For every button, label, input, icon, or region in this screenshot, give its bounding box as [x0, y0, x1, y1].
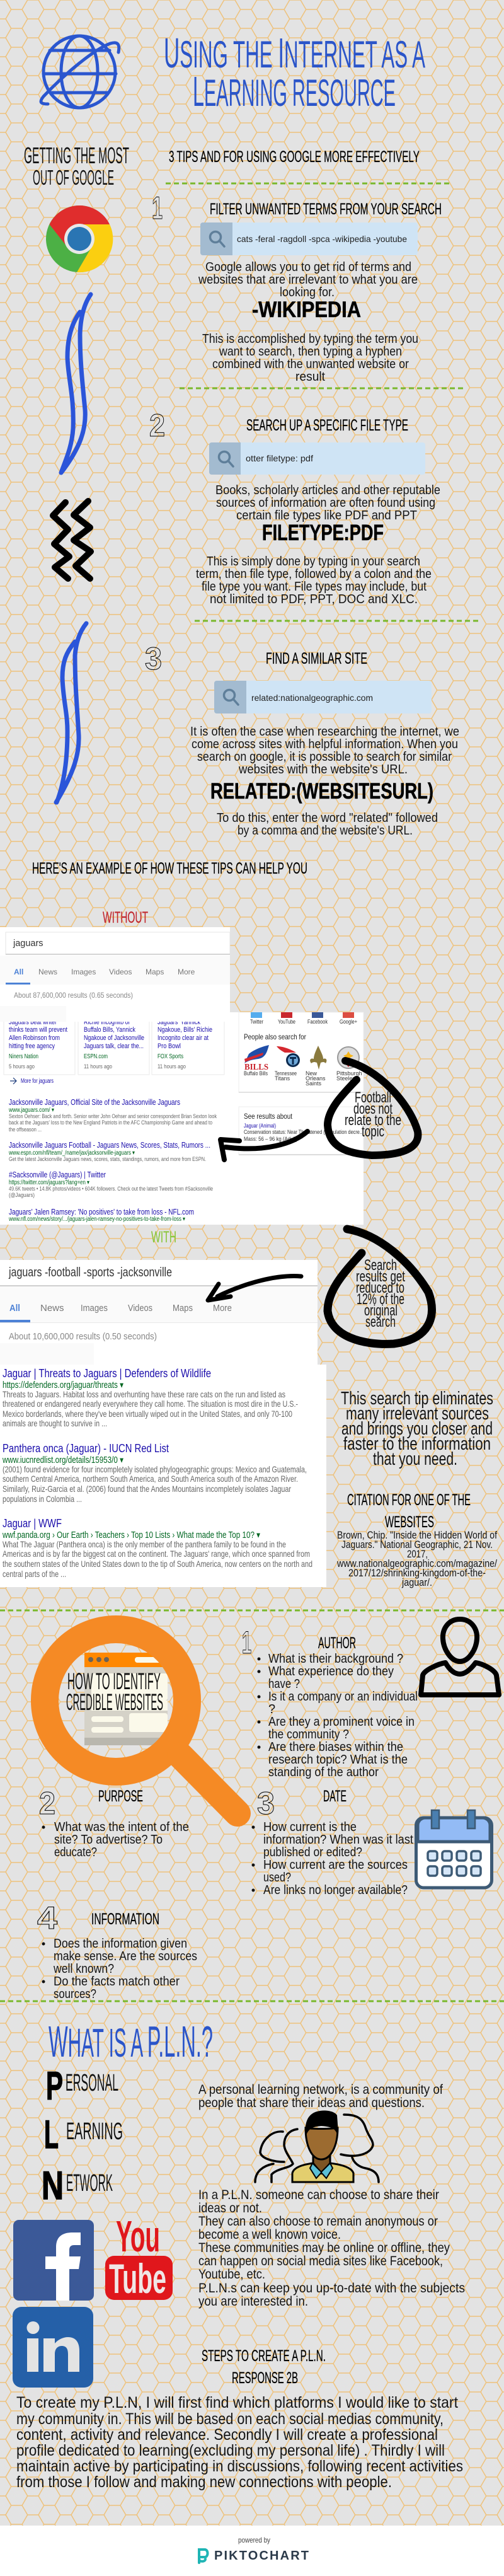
- title: [164, 30, 425, 115]
- search results list: Jacksonville Jaguars, Official Site of the Jacksonville Jaguars: [9, 1097, 180, 1107]
- news cards: Jaguars talk, clear the...: [84, 1043, 144, 1050]
- result: defenders of wildlife: Mexico borderlands, where they've been virtually wiped out in the United States, and only 70-100: [3, 1409, 292, 1419]
- text: steps paragraph: profile dedicated to learning(excluding my personal life) . Thirdly I will: [16, 2442, 445, 2459]
- callout: search results reduced: reduced to: [356, 1279, 404, 1297]
- icon: blue scribble 2: [56, 623, 86, 802]
- search box 3: related:nationalgeographic.com: [251, 693, 373, 703]
- tip 3 explanation: To do this, enter the word "related" followed: [217, 811, 438, 825]
- tip 3 heading: FIND A SIMILAR SITE: [266, 650, 367, 667]
- acronym: network: [42, 2164, 113, 2208]
- result: iucn red list: populations in Colombia ...: [3, 1494, 82, 1504]
- result: iucn red list: Panthera onca (Jaguar) - IUCN Red List: [3, 1442, 169, 1455]
- text: steps paragraph: content, activity and relevance. Secondly I will create a professional: [16, 2426, 438, 2444]
- screenshot: search without tip: More: [178, 967, 195, 976]
- tip 2 explanation: file type you want. File types may include, but: [202, 580, 427, 594]
- callout: football does not relate: does not: [353, 1100, 392, 1118]
- text: steps paragraph: my community in. This will be based on each social medias community,: [16, 2410, 444, 2428]
- icon: youtube: Tube: [109, 2255, 166, 2302]
- result: wwf: the southern states of the United States down to the tip of South America, now centers on the north and: [3, 1559, 312, 1569]
- acronym: learning: EARNING: [66, 2118, 123, 2145]
- criteria: date bullets: used?: [263, 1871, 291, 1885]
- result: iucn red list: www.iucnredlist.org/details/15953/0 ▾: [2, 1455, 124, 1465]
- icon: youtube: [105, 2212, 173, 2302]
- hand-drawn circle: reduced results callout: [328, 1229, 432, 1344]
- icon: globe: [41, 36, 119, 108]
- criteria: author bullets: Are they a prominent voice in: [268, 1715, 415, 1729]
- tip 2 heading: SEARCH UP A SPECIFIC FILE TYPE: [246, 417, 408, 434]
- criteria: author bullets: the community ?: [268, 1728, 349, 1741]
- search results list: Jaguars' Jalen Ramsey: 'No positives' to take from loss - NFL.com: [9, 1207, 194, 1216]
- tip 2 explanation: not limited to PDF, PPT, DOC and XLC.: [210, 592, 418, 606]
- icon: chrome logo: [46, 205, 113, 272]
- news cards: Allen Robinson from: [9, 1034, 60, 1042]
- text: PLN definition: people that share their ideas and questions.: [198, 2096, 425, 2110]
- news cards: Jaguars beat writer: [9, 1019, 57, 1026]
- screenshot: search without tip: About 87,600,000 results (0.65 seconds): [14, 991, 133, 1000]
- team logo: bills: [244, 1045, 269, 1072]
- infographic canvas: GETTING THE MOST: [24, 142, 129, 168]
- criteria: date bullets: How current are the sources: [263, 1858, 408, 1872]
- knowledge panel: [239, 1012, 364, 1155]
- citation heading: [347, 1491, 471, 1531]
- tip 1 explanation: [202, 332, 418, 384]
- screenshot: search with tip: News: [40, 1303, 64, 1314]
- icon: youtube: You: [116, 2212, 160, 2261]
- tip 2 number: 2: [149, 408, 165, 443]
- result: wwf: What The Jaguar (Panthera onca) is the only member of the panthera family to be found in the: [3, 1539, 286, 1549]
- result: defenders of wildlife: [3, 1367, 298, 1428]
- screenshot: search with tip: Maps: [173, 1303, 193, 1314]
- icon: person: [421, 1619, 499, 1695]
- result: wwf: [2, 1517, 312, 1579]
- infographic canvas: CREDIBLE WEBSITES: [66, 1689, 163, 1715]
- heading: getting the most out of google: [24, 142, 129, 189]
- tip 2 text: Books, scholarly articles and other reputable: [215, 483, 440, 497]
- criteria 3 number: 3: [257, 1786, 275, 1821]
- criteria: author bullets: research topic? What is the: [268, 1753, 408, 1767]
- heading: steps to create a PLN: STEPS TO CREATE A P.L.N.: [202, 2347, 326, 2365]
- text: PLN definition: A personal learning network, is a community of: [198, 2082, 443, 2097]
- criteria: author bullets: ?: [268, 1702, 275, 1716]
- callout: search results reduced: search: [365, 1314, 396, 1331]
- knowledge panel: Conservation status: Near Threatened (Population decre...: [244, 1129, 364, 1135]
- tip 1 explanation: combined with the unwanted website or: [212, 357, 409, 371]
- callout: search results reduced: results get: [356, 1268, 405, 1285]
- news cards: Jaguars' Yannick: [158, 1019, 200, 1026]
- search box 1: cats -feral -ragdoll -spca -wikipedia -youtube: [237, 234, 407, 244]
- label: without: WITHOUT: [103, 909, 148, 927]
- example heading: HERE'S AN EXAMPLE OF HOW THESE TIPS CAN HELP YOU: [32, 860, 307, 877]
- criteria: author bullets: What experience do they: [268, 1665, 394, 1678]
- screenshot: search with tip: jaguars -football -sports -jacksonville: [8, 1266, 172, 1279]
- callout: football does not relate: relate to the: [345, 1112, 401, 1129]
- knowledge panel: Facebook: [307, 1019, 328, 1025]
- acronym: personal: P: [46, 2064, 63, 2108]
- heading: what is a P.L.N.: WHAT IS A P.L.N.?: [49, 2017, 213, 2066]
- result: wwf: central parts of the ...: [3, 1569, 66, 1579]
- result: iucn red list: (2001) found evidence for four incompletely isolated phylogeographic groups: Mexico and Guatemala,: [3, 1464, 307, 1474]
- knowledge panel: Mass: 56 – 96 kg (Adult): [244, 1136, 297, 1142]
- criteria: information bullets: sources?: [54, 1987, 96, 2001]
- acronym: learning: L: [44, 2113, 59, 2157]
- news cards: FOX Sports: [158, 1053, 183, 1060]
- infographic canvas: HOW TO IDENTIFY: [67, 1668, 161, 1694]
- text: PLN details: you are interested in.: [198, 2294, 308, 2309]
- result: defenders of wildlife: threatened or endangered nearly everywhere they call home. The situation is most dire in the U.S.-: [3, 1399, 298, 1409]
- heading: response 2B: RESPONSE 2B: [232, 2369, 298, 2387]
- criteria: date bullets: published or edited?: [263, 1845, 362, 1859]
- citation heading: WEBSITES: [385, 1513, 434, 1531]
- text: PLN details: P.L.N.s can keep you up-to-date with the subjects: [198, 2281, 465, 2296]
- tip 1 operator: -WIKIPEDIA: [252, 297, 361, 322]
- text: PLN details: In a P.L.N. someone can choose to share their: [198, 2188, 439, 2202]
- citation text: 2017,: [407, 1549, 428, 1560]
- criteria: purpose bullets: What was the intent of the: [54, 1820, 189, 1834]
- team logo: saints: [310, 1046, 326, 1070]
- icon: black zigzag: [53, 501, 91, 579]
- criteria: author bullets: Is it a company or an individual: [268, 1690, 418, 1704]
- text: PLN details: can happen on social media sites like Facebook,: [198, 2254, 443, 2268]
- icon: blue scribble 1: [61, 294, 91, 473]
- criteria: author bullets: standing of the author: [268, 1765, 379, 1779]
- callout: football does not relate: Football: [355, 1089, 391, 1106]
- search results list: [8, 1097, 217, 1223]
- callout: search results reduced: [356, 1257, 405, 1331]
- news cards: Buffalo Bills, Yannick: [84, 1026, 135, 1034]
- tip 1 text: Google allows you to get rid of terms and: [205, 260, 411, 274]
- text: steps paragraph: [16, 2394, 463, 2491]
- infographic canvas: ETWORK: [66, 2170, 113, 2197]
- screenshot: search with tip: [0, 1260, 326, 1587]
- criteria: purpose heading: PURPOSE: [98, 1788, 143, 1805]
- result: iucn red list: Similarly, Ruiz-Garcia et al. (2006) found that the Andes Mountains incompletely isolates Jaguar: [3, 1484, 291, 1494]
- footer: powered by piktochart: powered by: [238, 2536, 270, 2544]
- icon: linkedin: [13, 2307, 93, 2388]
- news cards: thinks team will prevent: [9, 1026, 67, 1034]
- knowledge panel: Jaguar (Animal): [244, 1123, 276, 1129]
- screenshot: search without tip: Videos: [109, 967, 132, 976]
- result: iucn red list: southern Central America, northern South America, and South America south of the Amazon River.: [3, 1474, 298, 1484]
- result: defenders of wildlife: Threats to Jaguars. Habitat loss and overhunting have these rare cats on the run and listed as: [3, 1389, 285, 1399]
- criteria: information heading: INFORMATION: [91, 1910, 159, 1928]
- criteria 4 number: 4: [37, 1900, 57, 1936]
- screenshot: search without tip: Images: [71, 967, 96, 976]
- search results list: www.jaguars.com/ ▾: [8, 1107, 54, 1114]
- divider 2: [180, 387, 465, 390]
- criteria: author bullets: What is their background ?: [268, 1652, 403, 1666]
- search results list: Get the latest Jacksonville Jaguars news, scores, stats, standings, rumors, and more from ESPN.: [9, 1156, 206, 1162]
- search results list: #Sacksonville (@Jaguars) | Twitter: [9, 1170, 106, 1179]
- search results list: (@Jaguars): [9, 1192, 35, 1198]
- text: PLN details: Youtube, etc.: [198, 2267, 265, 2282]
- text: steps paragraph: To create my P.L.N, I will first find which platforms I would like to start: [16, 2394, 458, 2411]
- news cards: hitting free agency: [9, 1043, 55, 1050]
- knowledge panel: Orleans: [306, 1075, 326, 1082]
- criteria: information bullets: Do the facts match other: [54, 1975, 180, 1989]
- news cards: ESPN.com: [84, 1053, 108, 1060]
- screenshot: search without tip: All: [14, 967, 23, 976]
- result: wwf: Americas and is by far the biggest cat on the continent. The Jaguars' range, which once spanned from: [3, 1549, 310, 1559]
- hand-drawn circle: football callout: [328, 1061, 418, 1155]
- tip 3 number: 3: [145, 641, 162, 676]
- tip 2 text: sources of information are often found using: [216, 496, 435, 510]
- knowledge panel: People also search for: [244, 1032, 306, 1041]
- footer: powered by piktochart: [199, 2536, 309, 2563]
- result: wwf: wwf.panda.org › Our Earth › Teachers › Top 10 Lists › What made the Top 10? ▾: [2, 1530, 261, 1540]
- tip 1 number: 1: [152, 190, 163, 226]
- tip 1 explanation: This is accomplished by typing the term you: [202, 332, 418, 346]
- tip 1 text: [198, 260, 418, 299]
- criteria 2 number: 2: [39, 1786, 55, 1821]
- search box 2: [209, 442, 425, 475]
- infographic canvas: ERSONAL: [66, 2070, 118, 2096]
- tip 3 operator: RELATED:(WEBSITESURL): [210, 779, 433, 804]
- team logo: bills: BILLS: [244, 1063, 268, 1072]
- knowledge panel: Buffalo Bills: [244, 1070, 268, 1077]
- result: iucn red list: [2, 1442, 307, 1504]
- knowledge panel: Titans: [275, 1075, 290, 1082]
- criteria: information bullets: well known?: [53, 1962, 114, 1976]
- heading: getting the most out of google: OUT OF GOOGLE: [33, 166, 114, 189]
- tip 3 explanation: [217, 811, 438, 838]
- news cards: 11 hours ago: [158, 1063, 186, 1070]
- tip 1 explanation: want to search, then typing a hyphen: [219, 345, 402, 359]
- arrow: to football results: [220, 1131, 307, 1160]
- criteria: author bullets: Are there biases within the: [268, 1740, 403, 1754]
- news cards: Pro Bowl: [158, 1043, 181, 1050]
- tip 3 text: [190, 725, 459, 777]
- tip 2 explanation: term, then file type, followed by a colon and the: [196, 567, 432, 581]
- criteria: date bullets: [252, 1820, 413, 1897]
- news cards: [0, 1006, 230, 1085]
- callout: search results reduced: 12% of the: [357, 1291, 404, 1308]
- knowledge panel: Tennessee: [275, 1070, 297, 1077]
- tip 1 text: looking for.: [280, 286, 335, 299]
- text: steps paragraph: maintain active by participating in discussions, following recent activities: [16, 2458, 463, 2475]
- text: search tip conclusion: [341, 1389, 493, 1469]
- label: with: WITH: [151, 1228, 176, 1246]
- criteria: information bullets: Does the information given: [54, 1937, 187, 1951]
- news cards: More for jaguars: [21, 1078, 54, 1085]
- news cards: Ngakoue, Bills' Richie: [158, 1026, 212, 1034]
- news cards: Richie Incognito of: [84, 1019, 130, 1026]
- knowledge panel: See results about: [244, 1112, 293, 1121]
- search box 3: [214, 681, 432, 713]
- news cards: 11 hours ago: [84, 1063, 112, 1070]
- tip 2 explanation: [196, 555, 432, 606]
- knowledge panel: New: [306, 1070, 318, 1077]
- result: wwf: Jaguar | WWF: [3, 1517, 62, 1530]
- tip 2 explanation: This is simply done by typing in your search: [207, 555, 420, 569]
- knowledge panel: YouTube: [278, 1019, 295, 1025]
- tip 2 operator: FILETYPE:PDF: [262, 521, 384, 545]
- screenshot: search without tip: jaguars: [13, 939, 43, 949]
- tip 3 text: It is often the case when researching the internet, we: [190, 725, 459, 739]
- acronym: learning: [44, 2113, 123, 2157]
- callout: football does not relate: topic: [362, 1123, 384, 1140]
- icon: magnifier over browser window: [45, 1629, 238, 1813]
- tip 1 text: websites that are irrelevant to what you are: [198, 273, 418, 287]
- search results list: www.espn.com/nfl/team/_/name/jax/jacksonville-jaguars ▾: [8, 1150, 135, 1157]
- criteria: date bullets: Are links no longer available?: [263, 1883, 408, 1897]
- result: defenders of wildlife: animals are thought to survive in ...: [3, 1418, 107, 1428]
- heading: how to identify credible websites: [66, 1668, 163, 1715]
- search box 2: otter filetype: pdf: [246, 453, 313, 463]
- search results list: the offseason ...: [9, 1126, 42, 1133]
- result: defenders of wildlife: Jaguar | Threats to Jaguars | Defenders of Wildlife: [3, 1367, 211, 1380]
- divider 3: [195, 620, 481, 621]
- icon: group of people: [255, 2111, 379, 2182]
- screenshot: search with tip: About 10,600,000 results (0.50 seconds): [9, 1331, 157, 1342]
- criteria: date heading: DATE: [323, 1788, 346, 1805]
- screenshot: search without tip: [0, 927, 364, 1225]
- text: steps paragraph: from those I follow and making new connections with people.: [16, 2473, 392, 2491]
- criteria: information bullets: make sense. Are the sources: [54, 1949, 197, 1963]
- text: PLN details: [198, 2188, 465, 2309]
- news cards: Niners Nation: [9, 1053, 38, 1060]
- screenshot: search with tip: Images: [81, 1303, 108, 1314]
- screenshot: search with tip: Videos: [128, 1303, 152, 1314]
- screenshot: search without tip: News: [38, 967, 57, 976]
- arrow: to search terms: [208, 1276, 301, 1300]
- search box 1: [200, 222, 418, 255]
- screenshot: search with tip: More: [213, 1303, 232, 1314]
- icon: calendar: [416, 1810, 491, 1888]
- tip 2 text: [215, 483, 440, 523]
- text: PLN details: become a well known voice.: [198, 2227, 341, 2242]
- callout: football does not relate: [345, 1089, 401, 1140]
- search results list: back at the Jaguars' loss to the New England Patriots in the AFC Championship Game and ahead to: [9, 1119, 212, 1126]
- tip 3 explanation: by a comma and the website's URL.: [238, 824, 413, 838]
- result: defenders of wildlife: https://defenders.org/jaguar/threats ▾: [3, 1380, 124, 1390]
- criteria: author heading: AUTHOR: [318, 1634, 356, 1652]
- citation text: jaguar/.: [401, 1577, 432, 1588]
- screenshot: search with tip: All: [9, 1303, 20, 1314]
- citation text: [336, 1530, 497, 1588]
- text: PLN details: They can also choose to remain anonymous or: [198, 2214, 438, 2229]
- acronym: personal: [46, 2064, 118, 2108]
- tip 3 text: websites with the website's URL.: [238, 763, 408, 777]
- knowledge panel: Steelers: [336, 1075, 358, 1082]
- criteria 1 number: 1: [242, 1625, 251, 1660]
- callout: search results reduced: Search: [364, 1257, 397, 1274]
- criteria: date bullets: information? When was it last: [263, 1833, 413, 1847]
- criteria: information bullets: [42, 1937, 197, 2001]
- criteria: author bullets: [257, 1652, 418, 1779]
- knowledge panel: Twitter: [250, 1019, 263, 1025]
- search results list: 49.6K tweets • 14.8K photos/videos • 604K followers. Check out the latest Tweets from #Sacksonville: [9, 1186, 213, 1192]
- divider 1: [166, 183, 451, 184]
- news cards: Incognito clear air at: [158, 1034, 209, 1042]
- acronym: network: N: [42, 2164, 64, 2208]
- knowledge panel: Saints: [306, 1080, 322, 1087]
- criteria: purpose bullets: [42, 1820, 189, 1859]
- team logo: steelers: [338, 1047, 359, 1068]
- text: PLN definition: [198, 2082, 443, 2110]
- news cards: Ngakoue of Jacksonville: [84, 1034, 144, 1042]
- text: search tip conclusion: that you need.: [373, 1449, 457, 1469]
- search results list: https://twitter.com/jaguars?lang=en ▾: [9, 1179, 89, 1186]
- criteria: purpose bullets: site? To advertise? To: [54, 1833, 163, 1847]
- knowledge panel: Pittsburgh: [336, 1070, 362, 1077]
- divider 5: [0, 2001, 504, 2002]
- screenshot: search without tip: Maps: [146, 967, 164, 976]
- team logo: titans: [277, 1046, 300, 1067]
- text: PLN details: ideas or not.: [198, 2201, 262, 2215]
- tip 1 explanation: result: [295, 370, 325, 384]
- knowledge panel: Google+: [340, 1019, 357, 1025]
- criteria: purpose bullets: educate?: [54, 1845, 97, 1859]
- criteria: date bullets: How current is the: [263, 1820, 357, 1834]
- citation text: 2017/12/shrinking-kingdom-of-the-: [348, 1568, 486, 1579]
- footer: powered by piktochart: PIKTOCHART: [214, 2549, 309, 2563]
- search results list: www.nfl.com/news/story/.../jaguars-jalen-ramsey-no-positives-to-take-from-loss ▾: [8, 1216, 185, 1223]
- search results list: Jacksonville Jaguars Football - Jaguars News, Scores, Stats, Rumors ...: [9, 1140, 210, 1150]
- criteria: author bullets: have ?: [268, 1677, 300, 1691]
- callout: search results reduced: original: [364, 1302, 398, 1319]
- divider 4: [0, 1610, 504, 1611]
- tip 3 text: search on google, it is possible to search for similar: [197, 750, 452, 764]
- tip 2 text: certain file types like PDF and PPT: [236, 509, 417, 523]
- text: PLN details: These communities may be online or offline, they: [198, 2241, 450, 2255]
- search results list: Sexton Oehser: Back and forth. Senior writer John Oehser and senior correspondent Brian Sexton look: [9, 1113, 217, 1119]
- tip 3 text: come across sites with helpful information. When you: [192, 737, 458, 751]
- icon: facebook: [13, 2220, 94, 2301]
- news cards: 5 hours ago: [9, 1063, 35, 1070]
